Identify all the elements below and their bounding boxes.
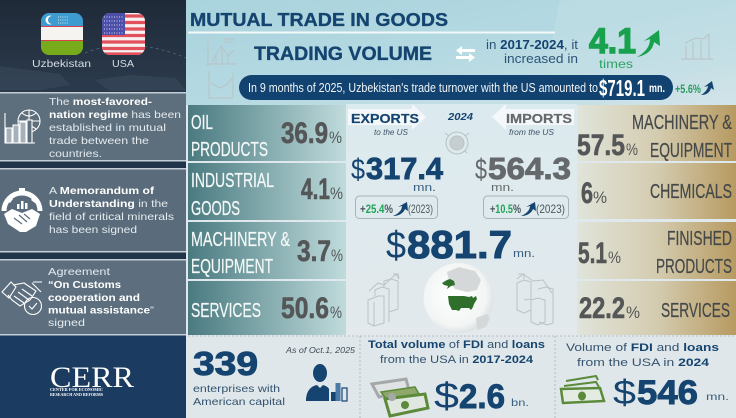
- icon: pie cycle: [445, 132, 469, 154]
- arrow: imports: IMPORTS: [506, 111, 572, 126]
- badge: exports growth: +25.4%: [360, 202, 393, 216]
- icon: businessman with bars: [306, 364, 347, 401]
- row: machinery and equipment: [577, 105, 736, 162]
- banner: 9 months: mn.: [649, 81, 665, 95]
- row: services: [577, 281, 736, 335]
- panel: imports breakdown: [577, 105, 736, 335]
- row: industrial goods: [188, 163, 346, 220]
- stat: enterprises: enterprises with: [193, 383, 280, 395]
- banner: 9 months: $719.1: [599, 75, 645, 101]
- row: machinery and equipment: EQUIPMENT: [191, 255, 273, 278]
- stat: imports value: 564.3: [488, 151, 571, 186]
- icon: money green: [561, 376, 604, 403]
- globe: [424, 263, 494, 333]
- row: services: %: [330, 303, 342, 322]
- icon: line chart top: [206, 38, 236, 66]
- icon: gear and handshake: [4, 188, 40, 232]
- row: oil products: 36.9: [281, 117, 328, 150]
- row: chemicals: [577, 163, 736, 219]
- stat: $2.6 bn: 2.6: [459, 378, 505, 416]
- text: 2024 FDI: from the USA in 2024: [577, 357, 710, 369]
- row: finished products: %: [608, 248, 621, 267]
- text: nation regime has been: [49, 109, 181, 121]
- stat: exports value: mn.: [413, 182, 436, 194]
- text: mutual assistance ”: [48, 304, 155, 316]
- row: machinery and equipment: MACHINERY &: [191, 228, 290, 251]
- text: 2024 FDI: [566, 342, 719, 369]
- row: machinery and equipment: 57.5: [577, 129, 625, 162]
- panel: bottom strip: [186, 336, 736, 418]
- stat: enterprises: As of Oct.1, 2025: [285, 346, 356, 355]
- row: oil products: [188, 105, 346, 161]
- text: A Memorandum of: [49, 185, 155, 197]
- text: “On Customs: [48, 279, 121, 291]
- text: increased in: increased in: [504, 52, 578, 66]
- logo: CERR: CENTER FOR ECONOMIC: [50, 387, 103, 392]
- stat: $546 mn: $: [613, 374, 636, 412]
- icon: USA flag: [102, 13, 145, 55]
- icon: chart and globe: [5, 110, 40, 143]
- country labels: Uzbekistan: [32, 58, 91, 70]
- text: cooperation and: [48, 292, 140, 304]
- title: MUTUAL TRADE IN GOODS: [190, 9, 448, 30]
- text: total FDI: from the USA in 2017-2024: [380, 354, 534, 366]
- text: signed: [48, 317, 85, 329]
- row: services: [188, 281, 346, 335]
- row: oil products: %: [329, 128, 342, 147]
- row: chemicals: 6: [581, 177, 593, 210]
- stat: $546 mn: [613, 374, 729, 412]
- badge: imports growth: [484, 196, 568, 218]
- banner: 9 months: [239, 75, 673, 101]
- icon: falling bars: [517, 274, 553, 325]
- text: established in mutual: [49, 122, 166, 134]
- stat: exports value: $: [351, 154, 365, 186]
- stat: imports value: $: [475, 154, 487, 186]
- text: has been signed: [49, 224, 137, 236]
- arrow: imports: [492, 104, 574, 137]
- stat: enterprises: [193, 345, 356, 408]
- text: trade between the: [49, 135, 149, 147]
- USA: [448, 296, 477, 311]
- row: industrial goods: 4.1: [301, 173, 330, 206]
- badge: exports growth: (2023): [408, 202, 433, 216]
- stat: 4.1 times: [589, 22, 660, 71]
- stat: $2.6 bn: bn.: [511, 397, 529, 409]
- icon: rising bars: [368, 274, 399, 326]
- banner: 9 months: In 9 months of 2025, Uzbekistan's trade turnover with the US amounted to: [248, 80, 598, 95]
- text: [48, 266, 155, 329]
- heading: trading volume: TRADING VOLUME: [254, 44, 432, 65]
- stat: imports value: mn.: [491, 182, 514, 194]
- stat: $2.6 bn: $: [434, 375, 459, 416]
- text: field of critical minerals: [49, 211, 174, 223]
- arrow: exports: to the US: [374, 128, 409, 137]
- row: industrial goods: GOODS: [191, 197, 240, 220]
- icon: bar trend: [681, 34, 713, 59]
- row: finished products: 5.1: [578, 237, 607, 270]
- text: Understanding in the: [49, 198, 168, 210]
- text: increased in: in 2017-2024 , it: [486, 38, 579, 52]
- row: services: SERVICES: [191, 299, 261, 322]
- badge: imports growth: +10.5%: [490, 202, 521, 216]
- icon: Uzbekistan flag: [41, 13, 83, 55]
- row: oil products: OIL: [191, 111, 213, 134]
- country labels: [32, 58, 134, 70]
- panel: customs agreement: [0, 259, 186, 336]
- badge: exports growth: [356, 196, 438, 218]
- text: [49, 96, 181, 160]
- arrow: exports: [348, 104, 426, 137]
- text: countries.: [49, 148, 102, 160]
- stat: $546 mn: mn.: [706, 391, 729, 403]
- panel: most-favored-nation regime: [0, 92, 186, 162]
- text: Agreement: [48, 266, 110, 278]
- text: The most-favored-: [49, 96, 153, 108]
- stat: exports value: [351, 151, 444, 194]
- row: oil products: PRODUCTS: [191, 138, 268, 161]
- text: increased in: [486, 38, 579, 66]
- arrow: exports: EXPORTS: [351, 111, 419, 126]
- row: machinery and equipment: %: [331, 246, 343, 265]
- row: chemicals: %: [593, 188, 607, 207]
- left sidebar: [0, 0, 186, 418]
- stat: 4.1 times: 4.1: [589, 22, 636, 61]
- arrow: imports: from the US: [509, 128, 555, 137]
- panel: memorandum of understanding: [0, 168, 186, 252]
- icon: handshake with check: [2, 282, 42, 314]
- row: machinery and equipment: [188, 222, 346, 279]
- logo: CERR: RESEARCH AND REFORMS: [50, 392, 103, 397]
- country labels: USA: [112, 58, 134, 70]
- badge: imports growth: (2023): [536, 202, 565, 216]
- Alaska: [442, 279, 455, 289]
- row: services: 50.6: [281, 292, 329, 325]
- stat: enterprises: American capital: [193, 396, 285, 408]
- row: finished products: [577, 222, 736, 279]
- stat: +5.6%: [675, 81, 714, 96]
- stat: enterprises: 339: [193, 345, 258, 382]
- stat: imports value: [475, 151, 571, 194]
- stat: $546 mn: 546: [637, 374, 698, 412]
- grey land: [447, 267, 490, 330]
- text: [49, 185, 174, 236]
- stat: exports value: 317.4: [366, 151, 444, 186]
- icon: exchange arrows: [456, 46, 475, 62]
- stat: total trade: 881.7: [407, 224, 512, 267]
- row: industrial goods: INDUSTRIAL: [191, 169, 274, 192]
- row: services: %: [626, 303, 640, 322]
- stat: 4.1 times: times: [599, 57, 633, 71]
- panel: exports breakdown: [188, 105, 346, 335]
- row: machinery and equipment: %: [626, 140, 638, 159]
- text: total FDI: [368, 339, 545, 366]
- row: machinery and equipment: 3.7: [297, 235, 331, 268]
- stat: total trade: mn.: [513, 248, 535, 260]
- text: total FDI: Total volume of FDI and loans: [368, 339, 545, 351]
- row: services: 22.2: [579, 292, 625, 325]
- row: industrial goods: %: [330, 184, 343, 203]
- icon: money grey and green: [372, 379, 428, 416]
- stat: +5.6%: +5.6%: [675, 84, 701, 96]
- stat: total trade: [386, 224, 535, 267]
- stat: total trade: $: [386, 225, 406, 267]
- year: 2024: [447, 112, 473, 123]
- icon: line chart lower: [209, 71, 233, 98]
- logo: CERR: CERR: [50, 361, 134, 394]
- text: 2024 FDI: Volume of FDI and loans: [566, 342, 719, 354]
- stat: $2.6 bn: [434, 375, 529, 416]
